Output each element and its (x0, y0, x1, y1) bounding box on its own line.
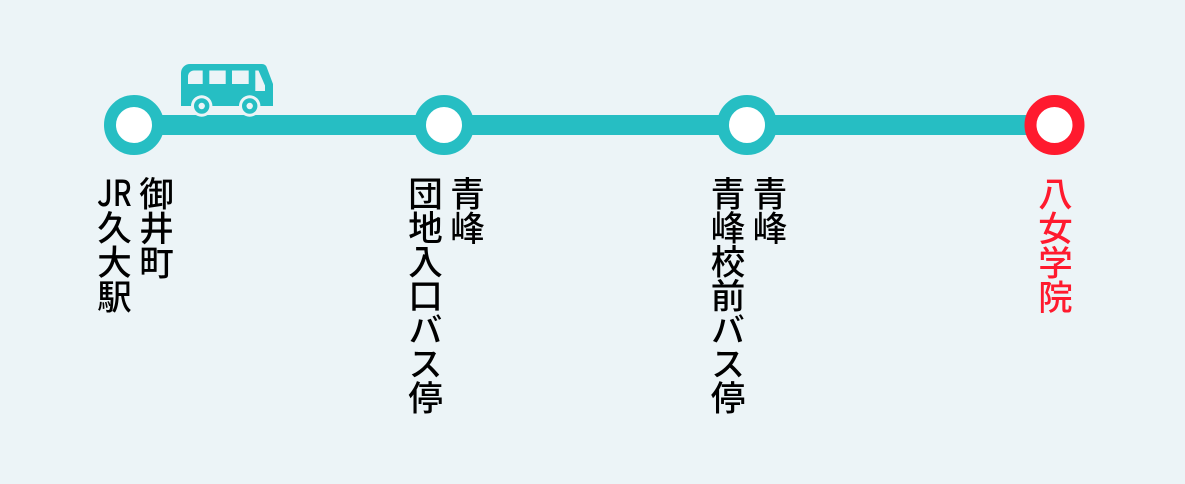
text: 青峰 (442, 176, 492, 244)
label: 青峰 青峰校前バス停 (703, 176, 795, 414)
label: JR久大駅 御井町 (90, 165, 182, 314)
text: 御井町 (132, 176, 182, 279)
text: 久大駅 (90, 210, 140, 314)
icon: bus (181, 64, 273, 117)
text: JR (97, 165, 132, 217)
text: 青峰校前バス停 (703, 176, 753, 414)
text: 八女学院 (1030, 176, 1080, 314)
route line (134, 115, 1054, 135)
station marker: 青峰青峰校前バス停 (723, 101, 771, 149)
text: 団地入口バス停 (400, 176, 450, 414)
station marker: 八女学院 (1030, 101, 1078, 149)
label: 青峰 団地入口バス停 (400, 176, 492, 414)
text: 青峰 (745, 176, 795, 244)
station marker: JR久大駅御井町 (110, 101, 158, 149)
station marker: 青峰団地入口バス停 (420, 101, 468, 149)
